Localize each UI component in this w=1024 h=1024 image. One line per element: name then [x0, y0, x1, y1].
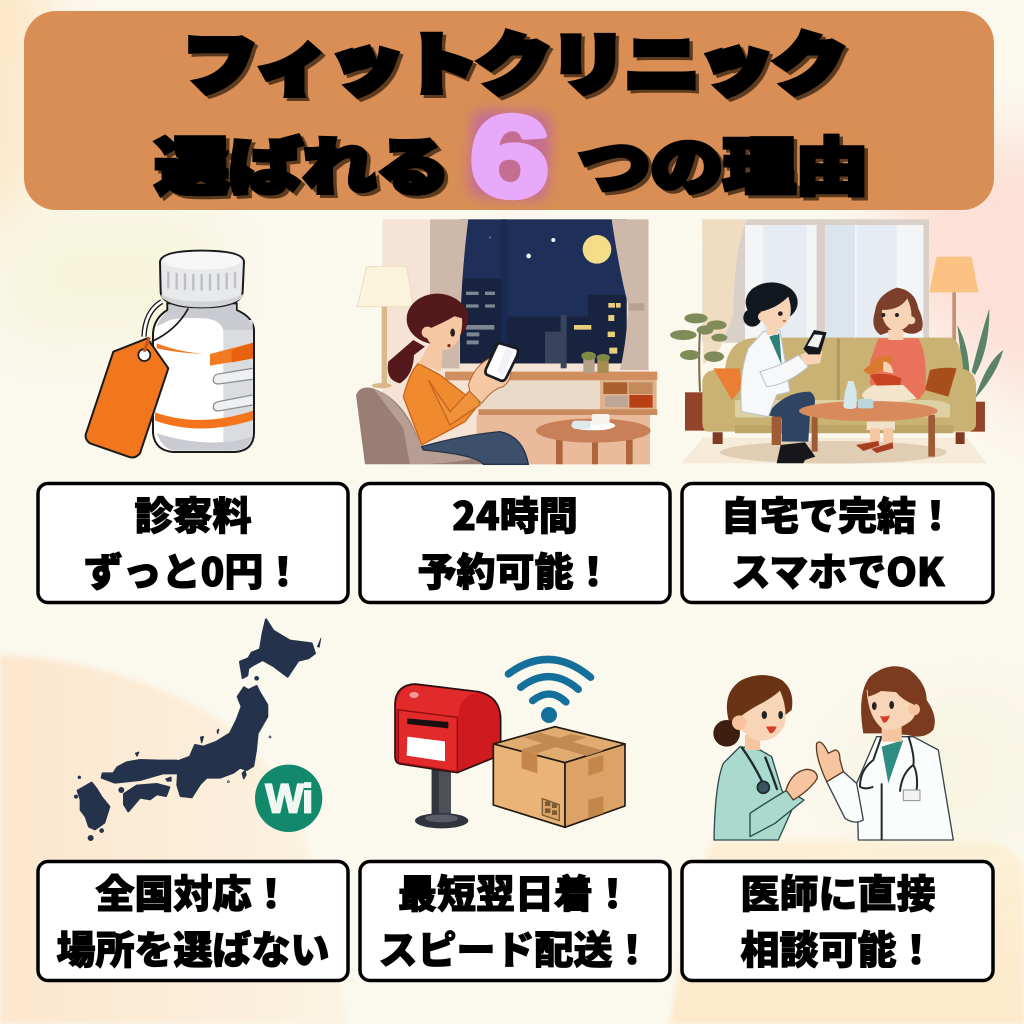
sofa — [702, 338, 976, 444]
caption: 医師に直接: 医師に直接 — [740, 864, 936, 920]
caption: 診察料: 診察料 — [134, 486, 252, 542]
illustration: two doctors talking — [713, 666, 953, 840]
left doctor hair back — [727, 675, 792, 730]
doctor face — [761, 297, 791, 329]
caption: 診察料: ずっと0円！ — [84, 542, 302, 598]
parcel — [493, 727, 625, 827]
caption: 全国対応 — [38, 862, 348, 980]
caption: 自宅で完結 — [682, 484, 993, 602]
caption: 全国対応: 場所を選ばない — [56, 920, 330, 976]
patient hair back — [873, 288, 923, 335]
face — [426, 312, 462, 350]
floor and desk — [477, 415, 650, 464]
caption: 24時間: 予約可能！ — [417, 542, 613, 598]
caption: 医師に直接: 相談可能！ — [740, 920, 936, 976]
title banner — [24, 11, 994, 223]
title line 2 right: つの理由 — [578, 118, 868, 207]
right doctor — [816, 666, 953, 840]
caption: 自宅で完結: スマホでOK — [731, 542, 945, 598]
window — [745, 219, 923, 343]
title line 1: フィットクリニック — [183, 13, 847, 108]
caption: 最短翌日着: 最短翌日着！ — [398, 864, 632, 920]
Wi badge: Wi — [265, 776, 312, 822]
smartphone — [485, 343, 518, 381]
right doctor hair back — [861, 666, 935, 737]
floor rug — [682, 438, 987, 463]
armchair — [356, 387, 485, 464]
hair back and ponytail — [388, 340, 425, 383]
Japan map — [75, 619, 321, 840]
left doctor face — [737, 691, 786, 741]
caption: 自宅で完結: 自宅で完結！ — [721, 486, 955, 542]
floor lamp — [357, 267, 413, 388]
right doctor fringe — [868, 668, 922, 705]
woman — [388, 294, 528, 464]
caption: 医師に直接 — [682, 862, 993, 980]
caption: 診察料 — [38, 484, 348, 602]
patient — [856, 288, 926, 453]
caption: 全国対応: 全国対応！ — [95, 864, 291, 920]
wifi signal — [508, 659, 591, 702]
plant right — [957, 308, 1003, 432]
patient face — [882, 298, 911, 331]
night window — [460, 219, 627, 368]
coffee table — [772, 381, 938, 457]
caption: 24時間 — [360, 484, 670, 602]
caption: 24時間: 24時間 — [452, 486, 578, 542]
illustration: doctor and patient on sofa — [670, 219, 1003, 464]
doctor hair back — [746, 282, 798, 322]
caption: 最短翌日着: スピード配送！ — [378, 920, 652, 976]
curtain — [702, 219, 747, 365]
right doctor face — [867, 690, 916, 730]
illustration: woman using smartphone at night — [356, 219, 657, 464]
mailbox — [395, 684, 501, 828]
side table — [536, 414, 651, 464]
floor lamp — [929, 257, 978, 342]
icon: map of Japan with Wi badge — [75, 619, 322, 840]
left doctor — [713, 675, 817, 840]
doctor — [741, 282, 827, 463]
Wi badge — [255, 765, 322, 832]
icon: mailbox, parcel and wifi signal — [395, 659, 625, 828]
caption: 最短翌日着 — [360, 862, 670, 980]
plant left — [670, 313, 727, 431]
glowing number 6: 6 — [467, 90, 553, 223]
title line 2 left: 選ばれる — [155, 117, 450, 207]
phone — [803, 330, 827, 354]
icon: medicine bottle with price tag — [86, 251, 254, 457]
curtains — [430, 219, 468, 368]
